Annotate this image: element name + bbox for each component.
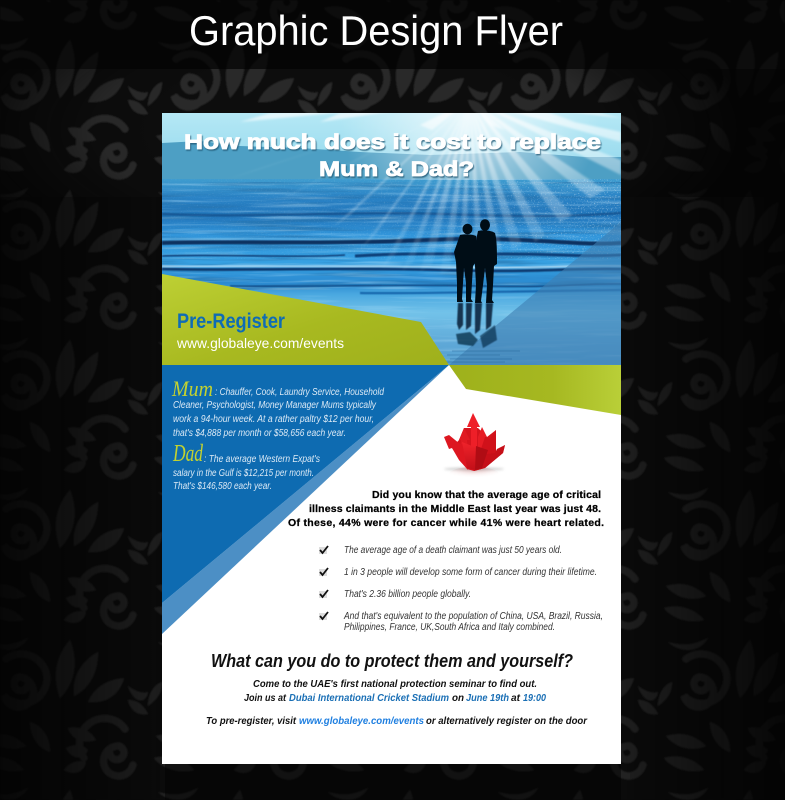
text block: seminar details: at [511, 692, 520, 704]
text block: registration: www.globaleye.com/events [299, 715, 424, 727]
text block: Mum: that's $4,888 per month or $58,656 each year. [173, 428, 346, 439]
text block: registration: To pre-register, visit [206, 715, 296, 727]
sea and beach [162, 179, 621, 365]
text block: seminar details: Join us at [244, 692, 286, 704]
heading: call to action: What can you do to protect them and yourself? [211, 651, 573, 671]
icon: red arrows [444, 413, 505, 481]
heading: photo headline: Mum & Dad? [319, 158, 474, 181]
text block: Dad: salary in the Gulf is $12,215 per month. [173, 468, 314, 479]
text block: seminar details: 19:00 [523, 692, 546, 704]
sun glow [356, 113, 582, 180]
text block: Dad [172, 441, 320, 492]
text block: did you know: illness claimants in the Middle East last year was just 48. [309, 503, 601, 515]
checklist [319, 545, 603, 633]
item 2: 1 in 3 people will develop some form of cancer during their lifetime. [344, 567, 597, 578]
text block: Mum [171, 376, 384, 439]
reflection of couple [456, 303, 497, 348]
text block: registration: or alternatively register on the door [426, 715, 588, 727]
text block: registration [206, 715, 588, 727]
couple silhouette [454, 219, 497, 303]
item 4: And that's equivalent to the population of China, USA, Brazil, Russia, [343, 611, 603, 622]
translucent blue facet [449, 222, 621, 365]
item 3: That's 2.36 billion people globally. [344, 589, 471, 600]
item 4: Philippines, France, UK,South Africa and Italy combined. [344, 622, 555, 633]
heading: photo headline [184, 131, 601, 181]
sand ripples [445, 351, 520, 362]
text block: Mum: Cleaner, Psychologist, Money Manager Mums typically [173, 400, 377, 411]
heading: photo headline: How much does it cost to replace [184, 131, 601, 154]
item 1: The average age of a death claimant was just 50 years old. [344, 545, 562, 556]
item 4 [319, 611, 603, 633]
text block: Mum: Mum [171, 376, 213, 401]
text block: seminar details: on [452, 692, 464, 704]
pre-register text [176, 310, 344, 351]
photo: couple on beach [162, 100, 621, 365]
text block: seminar details: Come to the UAE's first national protection seminar to find out. [253, 678, 537, 690]
text block: seminar details: June 19th [466, 692, 509, 704]
text block: Dad: Dad [172, 441, 204, 467]
sky [162, 113, 621, 157]
title: Graphic Design Flyer [189, 7, 563, 54]
text block: Dad: : The average Western Expat's [204, 454, 320, 465]
sun rays [243, 113, 621, 272]
text block: Mum: work a 94-hour week. At a rather paltry $12 per hour, [173, 414, 374, 425]
panel: green wedge [449, 365, 621, 415]
wave texture [162, 179, 621, 365]
text block: did you know: Of these, 44% were for cancer while 41% were heart related. [288, 517, 604, 529]
panel: blue triangle [162, 365, 449, 634]
text block: seminar details [244, 678, 546, 704]
text block: did you know: Did you know that the average age of critical [372, 489, 601, 501]
pre-register text: www.globaleye.com/events [176, 335, 344, 351]
green panel [162, 274, 449, 365]
text block: Dad: That's $146,580 each year. [173, 481, 272, 492]
text block: seminar details: Dubai International Cricket Stadium [289, 692, 449, 704]
pre-register text: Pre-Register [177, 310, 285, 333]
text block: Mum: : Chauffer, Cook, Laundry Service, Household [215, 387, 384, 398]
mountains [162, 141, 621, 180]
text block: did you know [288, 489, 604, 529]
flyer sheet [162, 100, 621, 764]
